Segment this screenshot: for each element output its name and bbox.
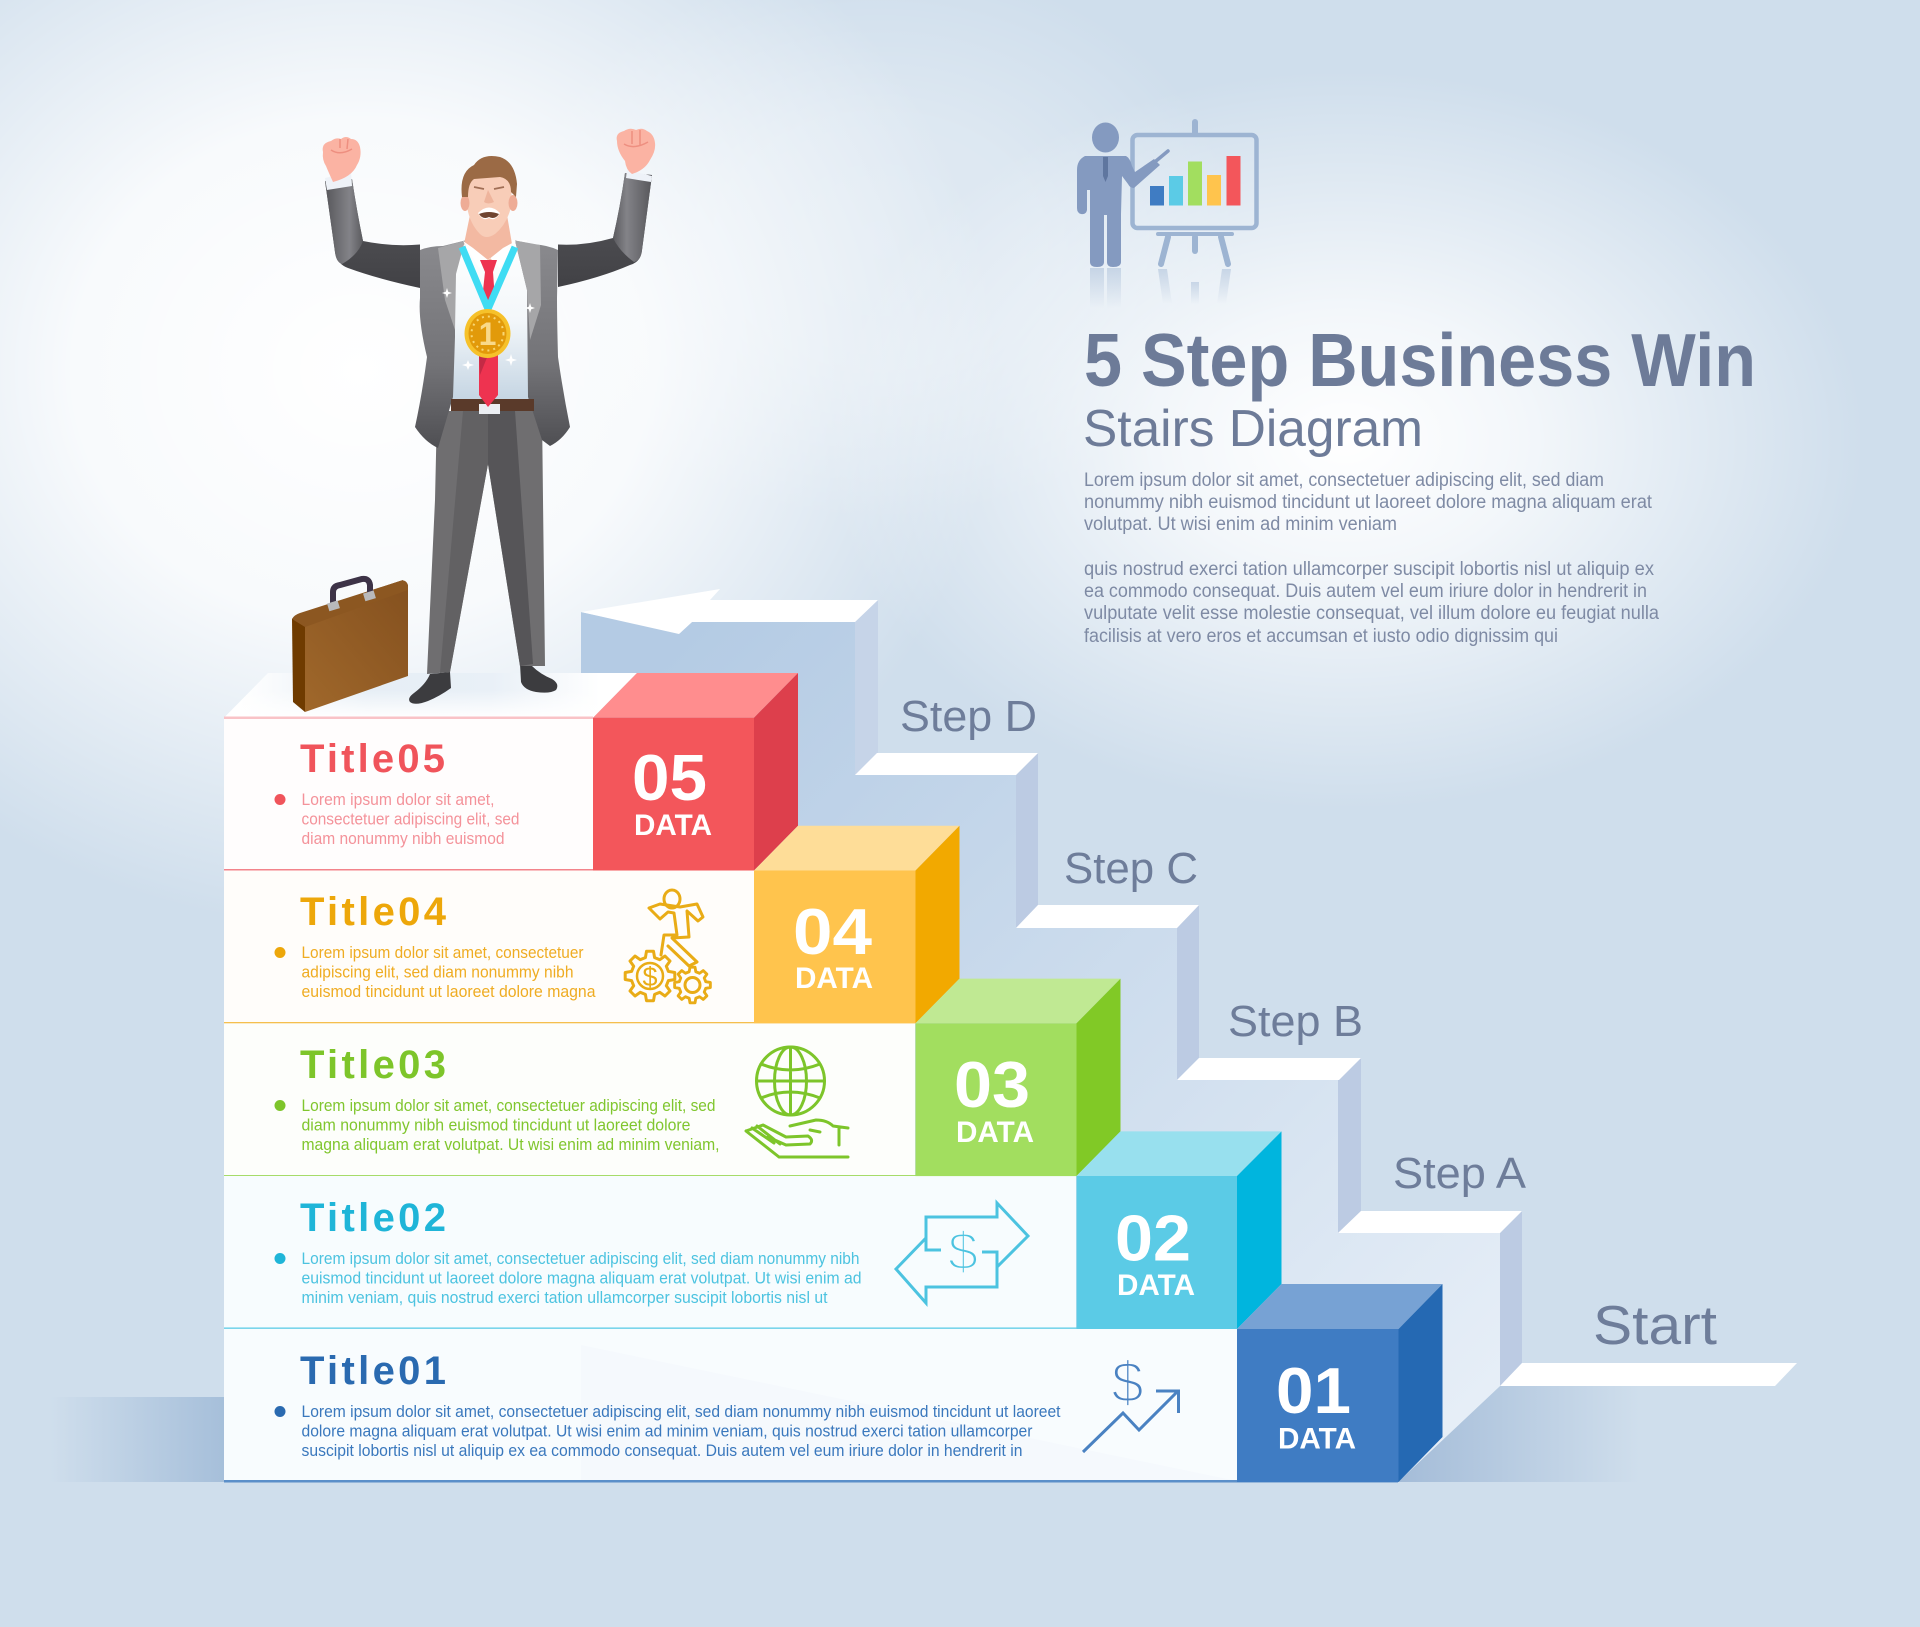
- panel: row 01: dolore magna aliquam erat volutpat. Ut wisi enim ad minim veniam, quis nostrud exerci tation ullamcorper: [302, 1422, 1033, 1440]
- collar: [463, 241, 516, 268]
- block 02: DATA: [1117, 1269, 1195, 1302]
- panel: row 01: Lorem ipsum dolor sit amet, consectetuer adipiscing elit, sed diam nonummy nibh euismod tincidunt ut laoreet: [302, 1402, 1061, 1421]
- intro text: [1084, 470, 1659, 647]
- panel: row 03: Title03: [300, 1043, 446, 1087]
- step labels: Step C: [1064, 844, 1198, 893]
- title: [1083, 318, 1756, 458]
- step labels: [900, 692, 1717, 1356]
- title: 5 Step Business Win: [1084, 318, 1756, 402]
- intro text: volutpat. Ut wisi enim ad minim veniam: [1084, 514, 1397, 535]
- jacket left: [415, 240, 465, 448]
- panel: row 02: Lorem ipsum dolor sit amet, consectetuer adipiscing elit, sed diam nonummy nibh: [302, 1249, 860, 1268]
- left arm: [325, 179, 420, 288]
- icon: globe in hand: [746, 1047, 848, 1157]
- necktie: [480, 260, 497, 305]
- panel: row 03: magna aliquam erat volutpat. Ut wisi enim ad minim veniam,: [302, 1135, 720, 1154]
- staircase back wall with steps: [581, 589, 1797, 1482]
- block 02: 02: [1115, 1202, 1191, 1274]
- panel: row 05: Lorem ipsum dolor sit amet,: [302, 790, 494, 809]
- panel: row 05: diam nonummy nibh euismod: [302, 829, 504, 848]
- block 05: 05: [632, 741, 707, 814]
- cuffs: [325, 172, 352, 190]
- step risers: [855, 600, 1522, 1386]
- block 05: [593, 673, 798, 870]
- panel: row 05: [224, 716, 754, 872]
- block 01: [1237, 1284, 1442, 1482]
- icon: runner on gears: $: [642, 962, 658, 992]
- jacket right: [515, 240, 570, 446]
- floor shadows: [50, 1386, 1640, 1482]
- neck: [464, 215, 512, 264]
- intro text: ea commodo consequat. Duis autem vel eum iriure dolor in hendrerit in: [1084, 581, 1647, 602]
- man in suit with gold medal: [323, 129, 655, 704]
- panel: row 04: euismod tincidunt ut laoreet dolore magna: [302, 982, 596, 1001]
- block 03: DATA: [956, 1116, 1034, 1149]
- easel: [1132, 122, 1256, 264]
- panel: row 03: Lorem ipsum dolor sit amet, consectetuer adipiscing elit, sed: [302, 1096, 716, 1115]
- icon: exchange arrows with dollar: $: [948, 1222, 978, 1282]
- panel: row 02: [224, 1176, 1237, 1330]
- panel: row 04: Lorem ipsum dolor sit amet, consectetuer: [302, 943, 584, 962]
- panel: row 03: [224, 1023, 1076, 1178]
- intro text: nonummy nibh euismod tincidunt ut laoreet dolore magna aliquam erat: [1084, 492, 1653, 513]
- face details: [474, 187, 504, 189]
- block 01: DATA: [1278, 1422, 1356, 1456]
- panel: row 01: [224, 1329, 1398, 1482]
- panel: row 01: suscipit lobortis nisl ut aliquip ex ea commodo consequat. Duis autem vel eum iriure dolor in hendrerit in: [302, 1441, 1022, 1460]
- icon: dollar growth arrow: $: [1111, 1350, 1144, 1415]
- block 03: 03: [954, 1048, 1030, 1121]
- gold medal: [464, 309, 510, 358]
- icon: runner on gears: [625, 890, 710, 1003]
- block 02: [1076, 1131, 1282, 1329]
- intro text: vulputate velit esse molestie consequat, vel illum dolore eu feugiat nulla: [1084, 603, 1659, 624]
- intro text: facilisis at vero eros et accumsan et iusto odio dignissim qui: [1084, 626, 1558, 647]
- sparkles: [442, 288, 535, 370]
- bar chart: [1150, 156, 1240, 206]
- hair: [462, 156, 517, 197]
- trousers: [427, 411, 545, 674]
- panel: row 02: minim veniam, quis nostrud exerci tation ullamcorper suscipit lobortis nisl ut: [302, 1288, 828, 1307]
- belt: [451, 399, 534, 411]
- panel: row 02: euismod tincidunt ut laoreet dolore magna aliquam erat volutpat. Ut wisi enim ad: [302, 1268, 862, 1288]
- panel: row 01: Title01: [300, 1349, 446, 1393]
- icon: exchange arrows with dollar: [896, 1203, 1028, 1303]
- block 03: [916, 979, 1120, 1176]
- panel: row 05: consectetuer adipiscing elit, sed: [302, 810, 520, 828]
- fists: [323, 129, 655, 182]
- shirt: [451, 240, 534, 400]
- block 04: [754, 826, 960, 1023]
- icon: dollar growth arrow: [1083, 1350, 1178, 1452]
- head: [466, 168, 512, 237]
- intro text: quis nostrud exerci tation ullamcorper suscipit lobortis nisl ut aliquip ex: [1084, 559, 1654, 580]
- presenter: [1077, 122, 1168, 267]
- step labels: Step D: [900, 692, 1037, 741]
- step labels: Step B: [1228, 997, 1363, 1046]
- gold medal: 1: [479, 316, 496, 352]
- block 04: DATA: [795, 962, 873, 995]
- panel: row 04: Title04: [300, 890, 447, 934]
- treads: [855, 753, 1797, 1386]
- panel: row 03: diam nonummy nibh euismod tincidunt ut laoreet dolore: [302, 1116, 690, 1134]
- subtitle: Stairs Diagram: [1083, 400, 1423, 458]
- reflection: [1090, 268, 1231, 308]
- block 05: DATA: [634, 809, 712, 842]
- panel: row 04: [224, 870, 915, 1024]
- right arm: [558, 173, 652, 287]
- panel: row 02: Title02: [300, 1196, 446, 1240]
- step labels: Step A: [1393, 1149, 1527, 1198]
- arrow top tread: [581, 589, 878, 634]
- panel: row 04: adipiscing elit, sed diam nonummy nibh: [302, 962, 574, 982]
- block 04: 04: [793, 895, 872, 968]
- platform top: [224, 673, 637, 718]
- icon: briefcase: [292, 579, 408, 712]
- step labels: Start: [1593, 1294, 1717, 1356]
- block 01: 01: [1276, 1354, 1351, 1427]
- shoes: [409, 664, 557, 704]
- ribbon: [462, 247, 515, 309]
- intro text: Lorem ipsum dolor sit amet, consectetuer adipiscing elit, sed diam: [1084, 470, 1604, 491]
- panel: row 05: Title05: [300, 737, 445, 781]
- icon: presenter at chart board: [1077, 122, 1256, 308]
